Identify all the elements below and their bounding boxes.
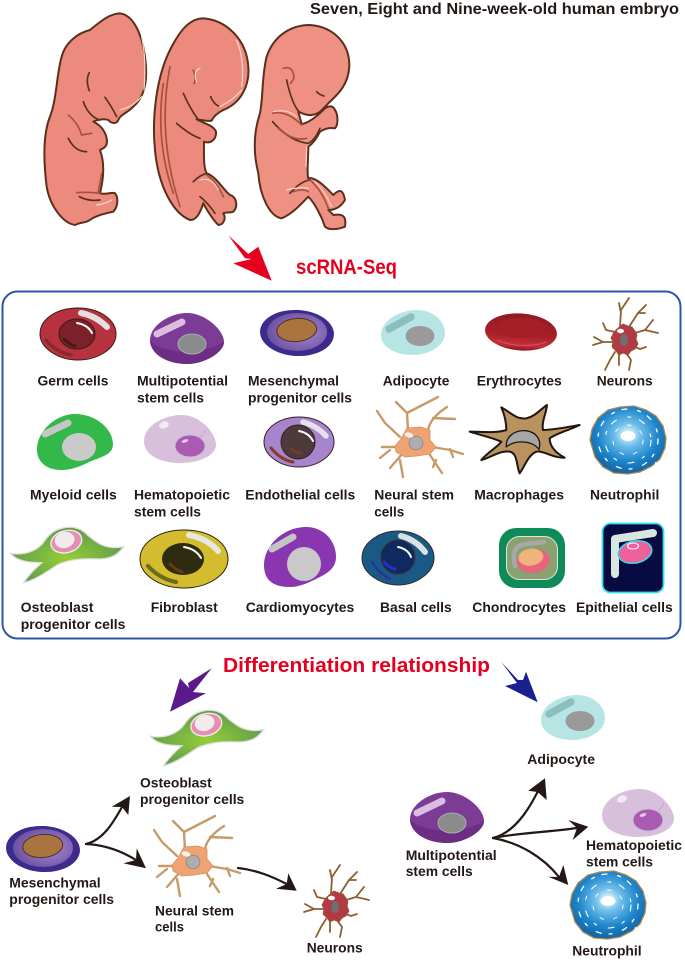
cell: hematopoietic stem cells: stem cells (586, 854, 653, 870)
title: Seven, Eight and Nine-week-old human embryo (310, 1, 679, 18)
cell: mesenchymal progenitor cells (248, 308, 352, 406)
cell: hematopoietic stem cells (134, 415, 230, 519)
cell: neutrophil: Neutrophil (590, 486, 659, 502)
cell: erythrocytes (477, 311, 562, 389)
heading: scRNA-Seq: scRNA-Seq (296, 256, 397, 279)
cell: basal cells: Basal cells (380, 599, 452, 615)
panel: cell types (2, 292, 680, 638)
arrow: multipotential to hematopoietic (493, 820, 588, 840)
cell: macrophages (470, 405, 580, 502)
cell: osteoblast progenitor cells: Osteoblast (140, 774, 212, 790)
illustration: eight-week embryo (154, 18, 248, 225)
cell: hematopoietic stem cells: Hematopoietic (134, 486, 230, 502)
cell: multipotential stem cells (137, 313, 228, 406)
cell: mesenchymal progenitor cells: progenitor cells (248, 390, 352, 406)
cell: chondrocytes (472, 528, 566, 615)
cell: germ cells (38, 308, 116, 389)
cell: endothelial cells (245, 417, 356, 502)
cell: neural stem cells (154, 816, 240, 935)
cell: germ cells: Germ cells (38, 373, 109, 389)
cell: adipocyte: Adipocyte (527, 751, 595, 767)
cell: neutrophil (590, 406, 666, 502)
cell: chondrocytes: Chondrocytes (472, 599, 566, 615)
arrow: mesenchymal to osteoblast (86, 796, 130, 844)
cell: neural stem cells: Neural stem (155, 902, 234, 918)
cell: hematopoietic stem cells (586, 789, 682, 870)
arrow: dark blue (501, 662, 538, 702)
cell: mesenchymal progenitor cells (5, 824, 114, 907)
cell: multipotential stem cells (406, 792, 497, 879)
cell: osteoblast progenitor cells (10, 527, 126, 632)
cell: fibroblast: Fibroblast (151, 599, 218, 615)
cell: osteoblast progenitor cells: Osteoblast (21, 599, 94, 615)
cell: neurons (304, 865, 369, 956)
cell: multipotential stem cells: stem cells (137, 390, 204, 406)
cell: macrophages: Macrophages (474, 486, 564, 502)
cell: neural stem cells: cells (374, 503, 405, 519)
diagram: multipotential lineage (406, 695, 682, 959)
illustration: seven-week embryo (44, 13, 146, 225)
cell: mesenchymal progenitor cells: Mesenchymal (248, 373, 339, 389)
cell: mesenchymal progenitor cells: Mesenchymal (9, 874, 101, 890)
cell: osteoblast progenitor cells: progenitor cells (21, 616, 126, 632)
illustration: nine-week embryo (255, 25, 349, 229)
cell: adipocyte: Adipocyte (383, 373, 450, 389)
cell: neurons (593, 298, 658, 389)
cell: cardiomyocytes: Cardiomyocytes (246, 599, 355, 615)
cell: basal cells (362, 531, 452, 615)
cell: mesenchymal progenitor cells: progenitor cells (9, 891, 114, 907)
cell: endothelial cells: Endothelial cells (245, 486, 356, 502)
heading: differentiation relationship: Differentiation relationship (223, 654, 490, 677)
cell: erythrocytes: Erythrocytes (477, 373, 562, 389)
cell: adipocyte (381, 310, 450, 389)
cell: neural stem cells: cells (155, 919, 184, 935)
cell: multipotential stem cells: Multipotential (137, 373, 228, 389)
cell: myeloid cells (30, 414, 117, 502)
cell: neutrophil: Neutrophil (572, 943, 642, 959)
cell: neurons: Neurons (307, 940, 363, 956)
cell: multipotential stem cells: stem cells (406, 863, 473, 879)
arrow: red to scRNA-Seq (228, 235, 272, 281)
arrow: multipotential to neutrophil (493, 838, 568, 885)
cell: myeloid cells: Myeloid cells (30, 486, 117, 502)
cell: fibroblast (140, 530, 228, 615)
diagram: mesenchymal lineage (5, 710, 369, 956)
arrow: neural stem to neurons (238, 868, 297, 891)
cell: osteoblast progenitor cells (140, 710, 264, 807)
cell: neural stem cells: Neural stem (374, 486, 454, 502)
cell: adipocyte (527, 695, 605, 767)
cell: epithelial cells: Epithelial cells (576, 599, 673, 615)
arrow: purple (170, 668, 212, 712)
cell: neurons: Neurons (597, 373, 653, 389)
cell: hematopoietic stem cells: stem cells (134, 503, 201, 519)
cell: osteoblast progenitor cells: progenitor cells (140, 791, 245, 807)
cell: hematopoietic stem cells: Hematopoietic (586, 837, 682, 853)
cell: cardiomyocytes (246, 527, 355, 615)
arrow: mesenchymal to neural stem (86, 844, 146, 868)
cell: epithelial cells (576, 524, 673, 615)
arrow: multipotential to adipocyte (493, 778, 547, 838)
cell: neutrophil (570, 871, 646, 959)
cell: neural stem cells (374, 397, 463, 519)
cell: multipotential stem cells: Multipotential (406, 847, 497, 863)
